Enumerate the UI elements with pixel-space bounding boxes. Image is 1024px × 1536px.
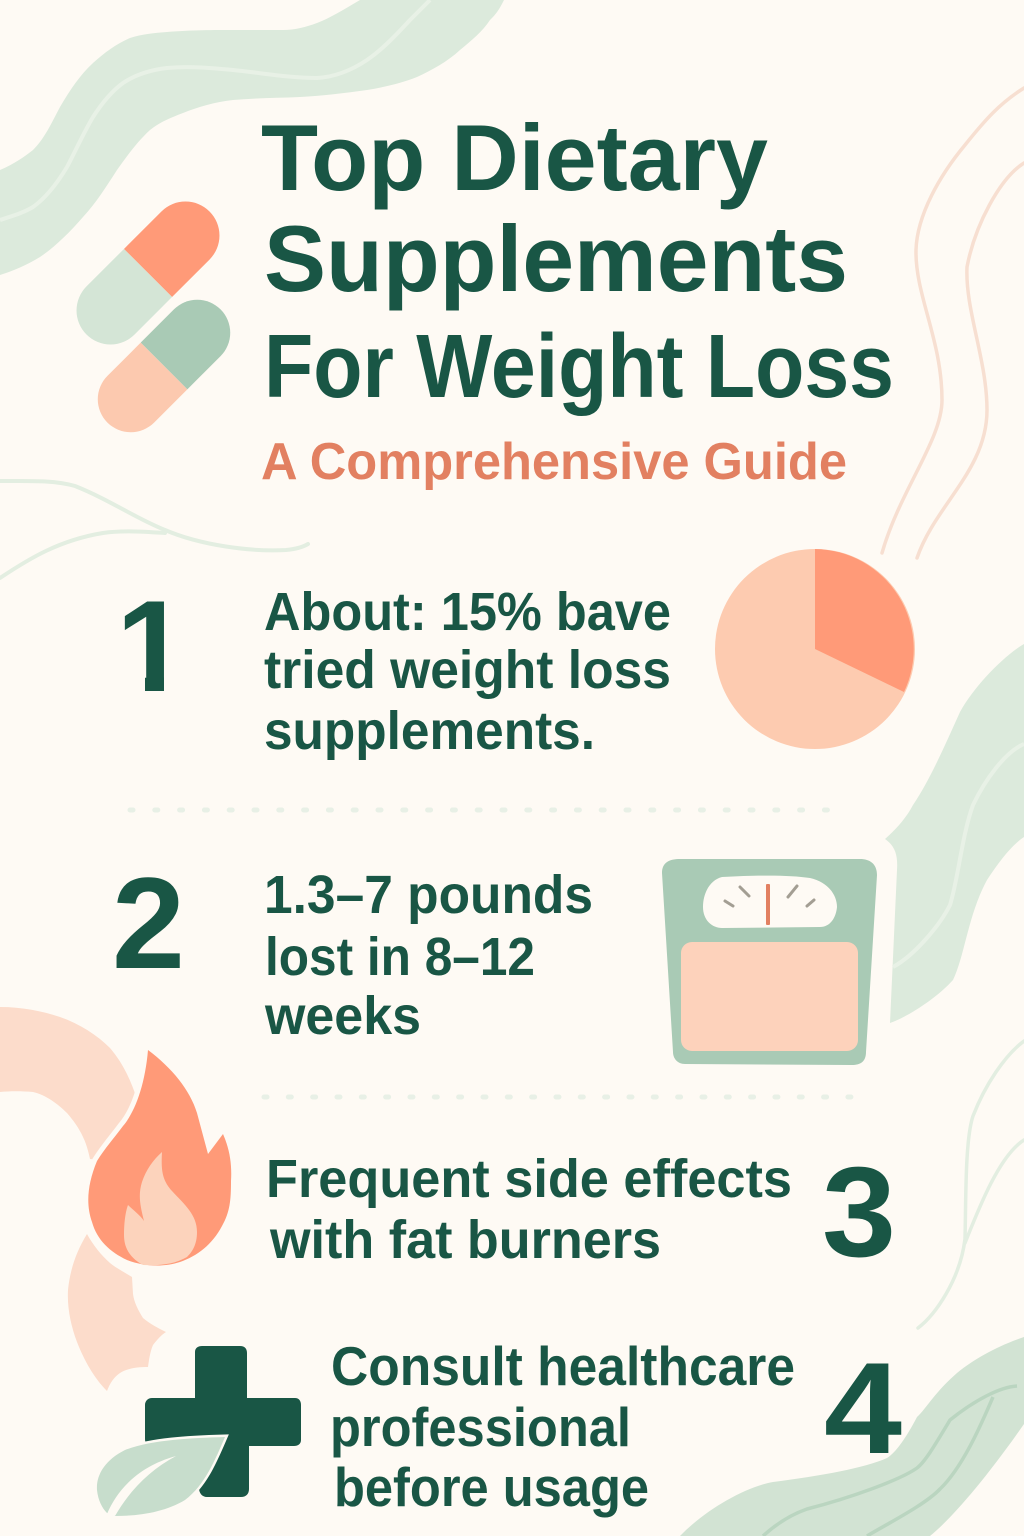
step 4 text: Consult healthcare <box>331 1335 795 1397</box>
step 2 text: lost in 8–12 <box>265 927 535 987</box>
title: Supplements <box>264 206 848 311</box>
title <box>261 105 894 417</box>
step 3 number: 3 <box>822 1141 896 1284</box>
step 4 number: 4 <box>824 1335 902 1481</box>
step 3 text: with fat burners <box>269 1210 661 1270</box>
title: For Weight Loss <box>264 317 894 417</box>
step 4 text: before usage <box>334 1456 649 1518</box>
step 3 text <box>266 1149 792 1270</box>
decorative wave: top left <box>0 0 504 275</box>
step 1 number: 1 <box>116 573 188 719</box>
step 3 text: Frequent side effects <box>266 1149 792 1209</box>
step 1 text: About: 15% bave <box>264 582 671 642</box>
icon: capsules <box>62 187 244 446</box>
title: Top Dietary <box>261 105 768 210</box>
decorative swoosh: lower left peach <box>0 1007 166 1391</box>
step 2 text: weeks <box>264 986 421 1046</box>
pie chart <box>715 549 915 749</box>
step 2 number: 2 <box>112 850 185 996</box>
decorative leaf: bottom right <box>680 1337 1024 1536</box>
dotted divider 2 <box>264 1094 852 1100</box>
step 4 text: professional <box>330 1396 631 1458</box>
step 4 text <box>330 1335 795 1518</box>
step 1 text <box>264 582 671 761</box>
icon: medical cross with leaf <box>97 1346 301 1516</box>
decorative lines: lower right green <box>918 1041 1024 1328</box>
subtitle: A Comprehensive Guide <box>261 433 847 491</box>
step 2 text: 1.3–7 pounds <box>264 865 593 925</box>
decorative leaf: right middle <box>885 644 1024 1023</box>
dotted divider 1 <box>130 808 830 812</box>
icon: flame <box>88 1050 231 1266</box>
decorative lines: top right peach <box>882 88 1024 558</box>
icon: weighing scale <box>662 859 877 1065</box>
decorative lines: left thin green <box>0 481 308 578</box>
step 1 text: supplements. <box>264 701 595 761</box>
step 2 text <box>264 865 593 1046</box>
step 1 text: tried weight loss <box>264 640 671 700</box>
